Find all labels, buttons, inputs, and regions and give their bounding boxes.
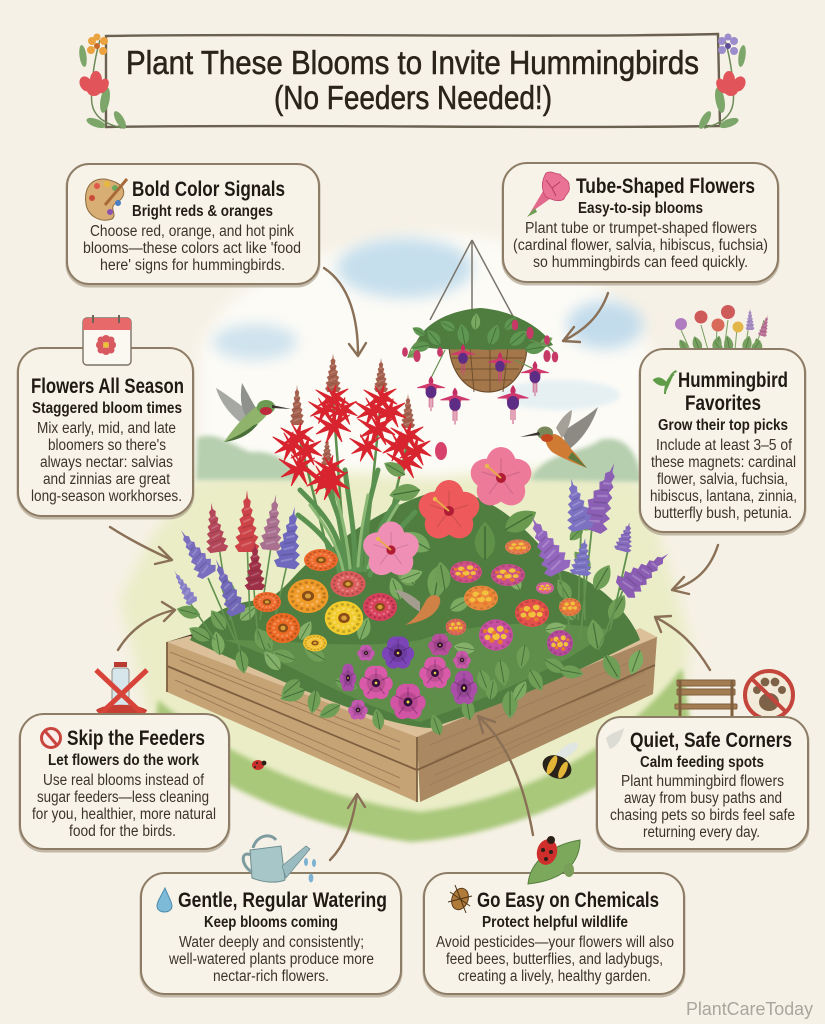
icon: calendar — [83, 315, 131, 365]
butterfly bush right — [519, 457, 677, 650]
hanging basket — [402, 240, 558, 425]
watermark: PlantCareToday — [686, 999, 813, 1019]
body: hibiscus, lantana, zinnia, — [650, 488, 797, 505]
body: feed bees, butterflies, and ladybugs, — [446, 951, 663, 968]
body: flower, salvia, fuchsia, — [657, 471, 788, 488]
cardinal flower stems and leaves — [298, 400, 415, 575]
hanger — [430, 240, 515, 320]
body: Use real blooms instead of — [43, 772, 205, 789]
body: bloomers so there's — [48, 437, 166, 454]
leaves — [175, 457, 647, 737]
icon: trumpet flower — [527, 172, 569, 217]
icon: dove — [606, 728, 624, 749]
fuchsia blooms — [418, 376, 444, 411]
heading: Tube-Shaped Flowers — [576, 174, 755, 198]
body: and zinnias are great — [43, 471, 171, 488]
body: butterfly bush, petunia. — [654, 505, 792, 522]
body — [32, 772, 216, 840]
heading: Skip the Feeders — [67, 726, 205, 750]
subheading: Protect helpful wildlife — [482, 914, 628, 931]
heading: Go Easy on Chemicals — [477, 888, 659, 912]
body: long-season workhorses. — [31, 488, 182, 505]
arrows — [110, 268, 718, 860]
meadow — [120, 436, 690, 842]
icon: palette — [86, 179, 127, 220]
petunias — [340, 634, 477, 720]
icon: bench — [675, 680, 737, 722]
icon: ladybug on leaf — [528, 836, 580, 884]
body — [513, 220, 768, 271]
heading: Flowers All Season — [31, 374, 184, 398]
left face — [167, 642, 417, 802]
hummingbird green — [216, 383, 291, 442]
body: well-watered plants produce more — [168, 951, 374, 968]
icon: beetle — [448, 885, 472, 913]
title banner — [77, 34, 748, 131]
body: always nectar: salvias — [40, 454, 173, 471]
icon: no sign — [42, 728, 60, 748]
body — [610, 773, 795, 841]
heading line 2: Favorites — [685, 391, 761, 415]
banner flowers left — [77, 34, 128, 131]
body: (cardinal flower, salvia, hibiscus, fuchsia) — [513, 237, 768, 254]
icon: no pets — [745, 671, 793, 719]
subheading: Calm feeding spots — [640, 754, 764, 771]
raised wooden bed — [167, 600, 657, 802]
hummingbird small — [395, 590, 440, 625]
body — [436, 934, 674, 985]
subheading: Grow their top picks — [658, 417, 788, 434]
body: Plant hummingbird flowers — [621, 773, 784, 790]
zinnias — [253, 549, 397, 651]
icon: flower patch — [675, 305, 772, 354]
body: these magnets: cardinal — [651, 454, 796, 471]
card: tube-shaped flowers — [503, 163, 778, 284]
icon: crossed feeder — [94, 662, 149, 720]
arrow: bold color to garden — [324, 268, 366, 356]
card: bold color signals — [67, 164, 319, 286]
body: chasing pets so birds feel safe — [610, 807, 795, 824]
body: creating a lively, healthy garden. — [458, 968, 651, 985]
body: Choose red, orange, and hot pink — [90, 223, 294, 240]
body: blooms—these colors act like 'food — [83, 240, 301, 257]
icon: water drop — [157, 888, 172, 912]
subheading: Staggered bloom times — [32, 400, 182, 417]
card: hummingbird favorites — [640, 305, 805, 534]
body: Water deeply and consistently; — [179, 934, 364, 951]
body: sugar feeders—less cleaning — [37, 789, 209, 806]
body: returning every day. — [643, 824, 760, 841]
banner flowers right — [697, 34, 748, 131]
right face — [417, 637, 657, 802]
lantanas — [446, 539, 581, 656]
arrow: chemicals to bed — [478, 716, 533, 835]
body — [168, 934, 374, 985]
title frame — [106, 34, 720, 127]
card: gentle regular watering — [141, 836, 401, 996]
hummingbird rufous — [520, 407, 598, 468]
subheading: Easy-to-sip blooms — [578, 200, 703, 217]
body: Plant tube or trumpet-shaped flowers — [525, 220, 757, 237]
body: for you, healthier, more natural — [32, 806, 216, 823]
body: Avoid pesticides—your flowers will also — [436, 934, 674, 951]
subheading: Keep blooms coming — [204, 914, 338, 931]
heading: Gentle, Regular Watering — [178, 888, 387, 912]
card: flowers all season — [18, 315, 193, 518]
subheading: Bright reds & oranges — [132, 203, 273, 220]
arrow: favorites to butterfly bush — [672, 545, 718, 594]
arrow: quiet to bed — [655, 616, 710, 670]
ladybug on ground — [252, 760, 266, 770]
basket foliage — [406, 308, 556, 380]
body: nectar-rich flowers. — [213, 968, 329, 985]
body: Include at least 3–5 of — [656, 437, 793, 454]
heading: Quiet, Safe Corners — [630, 728, 792, 752]
body: here' signs for hummingbirds. — [100, 257, 285, 274]
sky wash — [200, 234, 650, 480]
hibiscus flowers — [359, 442, 535, 581]
heading: Hummingbird — [678, 368, 788, 392]
bumble bee — [539, 739, 581, 783]
central garden illustration — [120, 234, 690, 842]
heading: Bold Color Signals — [132, 177, 285, 201]
card: go easy on chemicals — [424, 836, 684, 996]
card: quiet safe corners — [597, 671, 808, 851]
title line 1: Plant These Blooms to Invite Hummingbirds — [126, 44, 699, 81]
arrow: tube flowers to basket — [563, 293, 608, 342]
body: away from busy paths and — [624, 790, 782, 807]
subheading: Let flowers do the work — [48, 752, 199, 769]
cardinal flower spikes — [273, 354, 431, 500]
body: Mix early, mid, and late — [37, 420, 176, 437]
arrow: season to salvias — [110, 527, 172, 564]
body — [650, 437, 797, 522]
card: skip the feeders — [20, 662, 229, 851]
salvia spikes left — [169, 490, 308, 650]
foliage mass — [190, 490, 640, 728]
body — [83, 223, 301, 274]
arrow: watering to bed — [330, 794, 365, 860]
body: so hummingbirds can feed quickly. — [533, 254, 748, 271]
icon: seedling — [654, 371, 676, 394]
basket bowl — [449, 347, 527, 392]
arrow: skip feeders to salvia — [118, 602, 175, 650]
title line 2: (No Feeders Needed!) — [274, 79, 552, 116]
body: food for the birds. — [69, 823, 176, 840]
body — [31, 420, 182, 505]
icon: watering can — [243, 836, 316, 882]
